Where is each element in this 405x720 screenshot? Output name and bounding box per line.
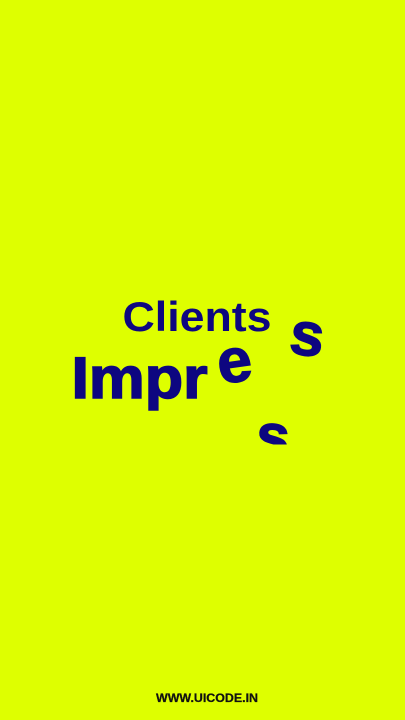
- falling letter: e: e: [212, 325, 256, 398]
- footer website address: WWW.UICODE.IN: [156, 693, 258, 705]
- animated headline and footer canvas: [74, 300, 322, 702]
- heading word: Impr: Impr: [72, 346, 208, 411]
- falling letter: s: s: [286, 298, 328, 370]
- falling letter: s, clipped: s: [254, 401, 292, 470]
- heading word: Clients: Clients: [122, 293, 272, 340]
